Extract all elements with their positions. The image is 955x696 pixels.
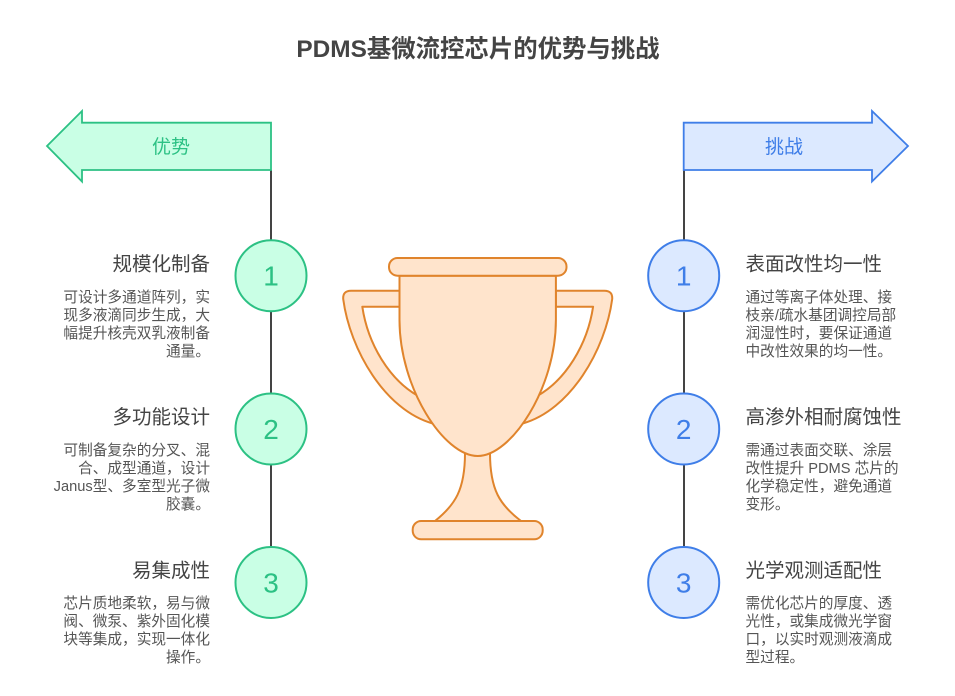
advantage 2 text: 多功能设计 — [112, 406, 210, 428]
challenge 1 marker — [648, 240, 719, 311]
challenge 1 text: 枝亲/疏水基团调控局部 — [746, 307, 896, 324]
challenge 2 marker: 2 — [676, 414, 691, 445]
timeline line: challenges — [683, 170, 685, 546]
challenge 2 text: 变形。 — [746, 496, 789, 513]
arrow: advantages — [47, 111, 271, 182]
challenge 1 text: 通过等离子体处理、接 — [746, 288, 892, 306]
challenge 3 text: 光性，或集成微光学窗 — [746, 612, 892, 630]
advantage 2 text: 合、成型通道，设计 — [78, 460, 210, 477]
trophy base — [413, 521, 543, 539]
challenge 2 text — [746, 406, 902, 513]
challenge 3 marker: 3 — [676, 568, 691, 598]
advantage 1 text: 幅提升核壳双乳液制备 — [63, 325, 210, 342]
advantage 2 text: Janus型、多室型光子微 — [54, 478, 210, 495]
challenge 1 text — [746, 254, 896, 360]
arrow: advantages: 优势 — [152, 136, 190, 158]
challenge 3 text: 需优化芯片的厚度、透 — [746, 595, 892, 612]
advantage 1 marker — [236, 240, 306, 311]
advantage 3 marker: 3 — [263, 568, 279, 598]
advantage 2 marker: 2 — [263, 414, 279, 445]
advantage 3 text: 块等集成，实现一体化 — [63, 630, 210, 648]
trophy left handle — [343, 291, 433, 424]
advantage 2 marker — [236, 394, 306, 464]
challenge 2 text: 改性提升 PDMS 芯片的 — [746, 460, 899, 477]
advantage 3 text: 阀、微泵、紫外固化模 — [63, 613, 210, 630]
challenge 1 text: 表面改性均一性 — [746, 254, 882, 276]
advantage 1 text: 现多液滴同步生成，大 — [63, 306, 210, 324]
trophy stem — [435, 453, 521, 521]
arrow: challenges: 挑战 — [765, 136, 803, 158]
trophy rim — [389, 258, 566, 276]
advantage 3 text: 易集成性 — [132, 560, 210, 582]
trophy right handle — [523, 291, 612, 424]
challenge 3 text: 光学观测适配性 — [746, 560, 882, 582]
timeline line: advantages — [270, 170, 272, 546]
advantage 1 text: 规模化制备 — [112, 254, 210, 276]
arrow: challenges — [684, 111, 908, 182]
advantage 2 text: 胶囊。 — [166, 496, 210, 513]
advantage 1 text — [63, 254, 210, 360]
challenge 3 text: 口，以实时观测液滴成 — [746, 630, 892, 648]
trophy cup — [400, 276, 556, 456]
challenge 1 text: 中改性效果的均一性。 — [746, 343, 892, 360]
advantage 1 marker: 1 — [263, 260, 279, 292]
advantage 3 text — [63, 560, 210, 666]
advantage 3 text: 芯片质地柔软，易与微 — [63, 595, 210, 612]
challenge 2 text: 高渗外相耐腐蚀性 — [746, 406, 902, 428]
advantage 2 text: 可制备复杂的分叉、混 — [63, 441, 210, 459]
challenge 2 text: 化学稳定性，避免通道 — [746, 478, 892, 495]
advantage 3 text: 操作。 — [166, 649, 210, 666]
icon: trophy — [343, 258, 612, 539]
challenge 2 text: 需通过表面交联、涂层 — [746, 441, 892, 459]
advantage 1 text: 可设计多通道阵列，实 — [63, 289, 210, 306]
challenge 3 marker — [648, 547, 719, 618]
challenge 2 marker — [648, 394, 719, 464]
challenge 1 marker: 1 — [676, 260, 691, 292]
challenge 3 text: 型过程。 — [746, 649, 804, 666]
title: PDMS基微流控芯片的优势与挑战 — [296, 36, 660, 63]
challenge 1 text: 润湿性时，要保证通道 — [746, 325, 892, 342]
challenge 3 text — [746, 560, 892, 666]
advantage 1 text: 通量。 — [166, 343, 210, 360]
advantage 3 marker — [236, 547, 306, 618]
advantage 2 text — [54, 406, 210, 513]
